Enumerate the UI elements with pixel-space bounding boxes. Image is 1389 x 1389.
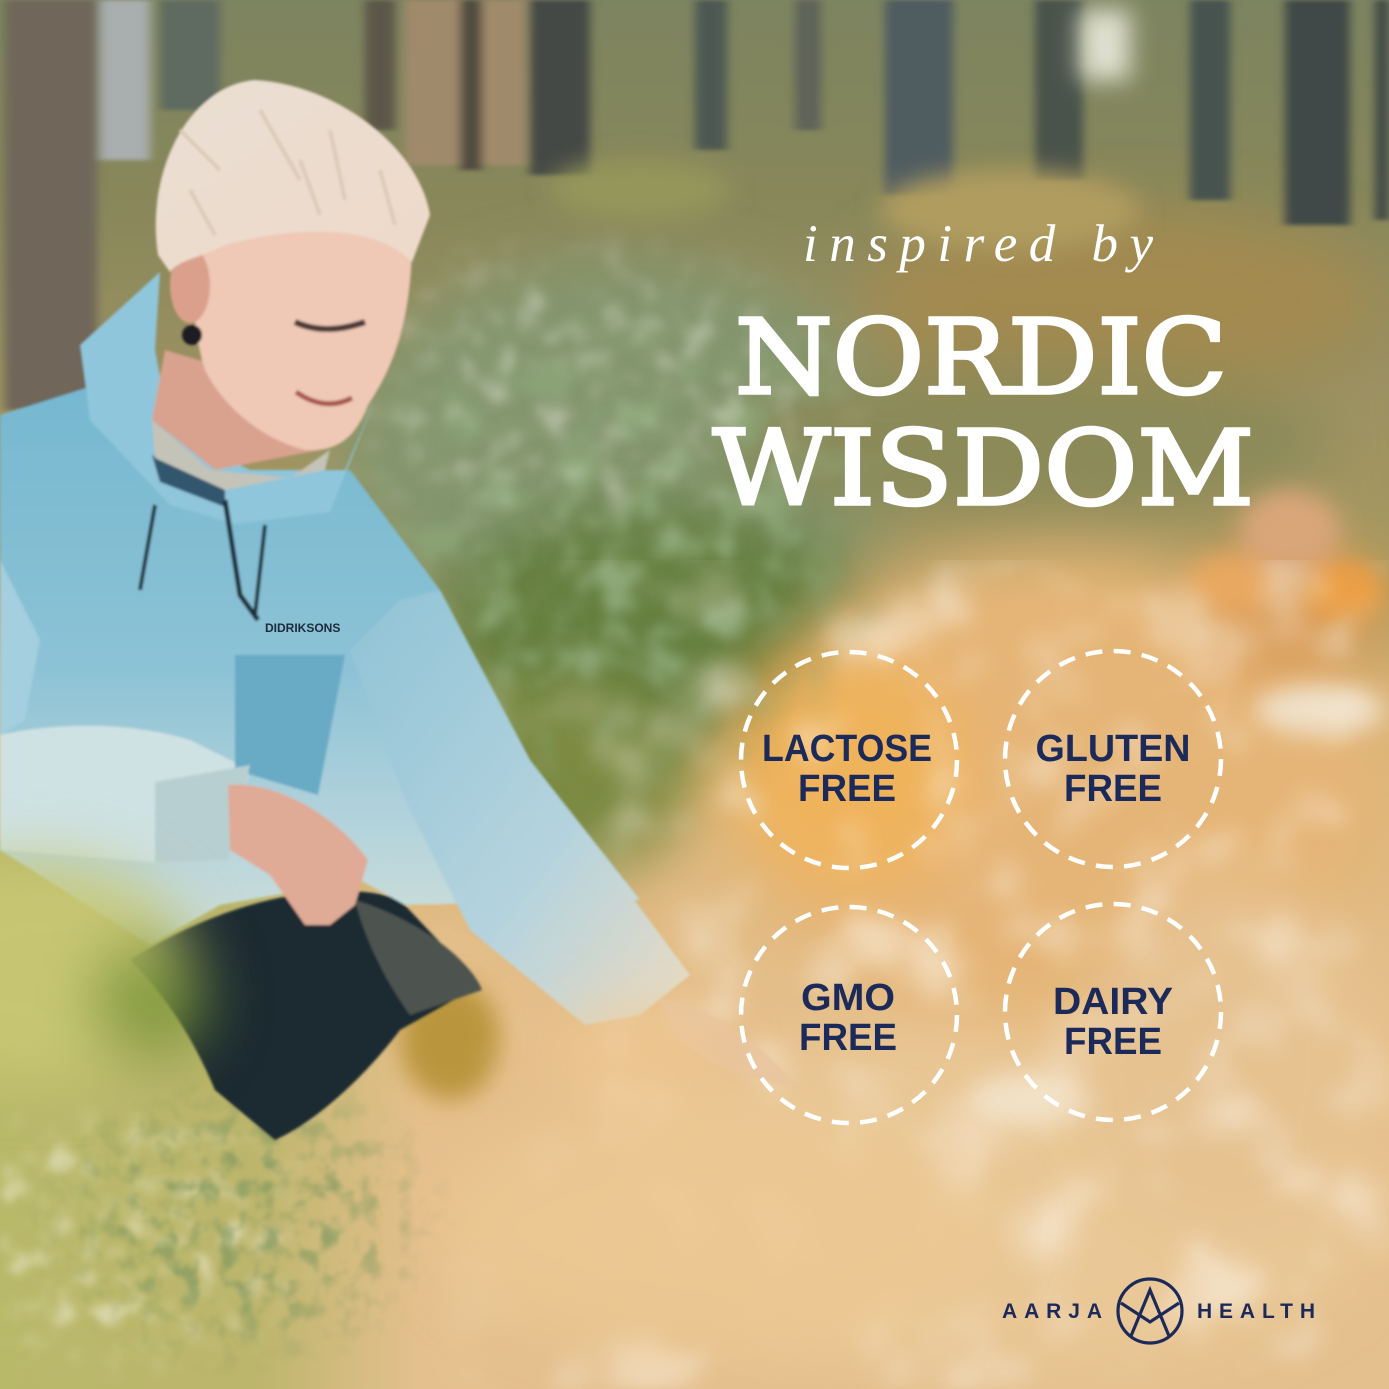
face: [193, 231, 412, 450]
foreground blur haze: [0, 860, 1000, 1350]
haze texture over warm field: [420, 560, 1389, 1389]
jacket body: [0, 388, 640, 945]
badge: dairy free: [1005, 904, 1221, 1120]
knee highlight: [355, 900, 482, 1015]
foreground grass texture: [0, 1110, 291, 1368]
logo: Aarja Health: HEALTH: [1197, 1300, 1315, 1323]
badge: lactose free: FREE: [798, 768, 896, 810]
title: NORDIC: NORDIC: [735, 298, 1227, 418]
logo: Aarja Health: AARJA: [1002, 1300, 1102, 1323]
eye and mouth: [295, 322, 365, 329]
left sleeve: [0, 726, 250, 862]
background: tree trunks: [5, 0, 1389, 410]
reaching hand: [660, 1000, 800, 1090]
title: WISDOM: WISDOM: [713, 409, 1254, 529]
chest pocket: [235, 655, 345, 795]
badge: gluten free: GLUTEN: [1036, 728, 1190, 770]
badge: gmo free: FREE: [799, 1017, 897, 1059]
hair: [156, 80, 430, 272]
badge: dairy free: DAIRY: [1053, 981, 1173, 1023]
logo: Aarja Health: [1002, 1279, 1315, 1343]
cuff: [155, 765, 250, 862]
badge: dairy free: FREE: [1064, 1021, 1162, 1063]
dark trousers: [130, 891, 480, 1140]
earring: [182, 325, 202, 345]
person: woman crouching in blue jacket: [0, 80, 800, 1140]
hood: [80, 272, 375, 524]
ear: [170, 247, 210, 323]
badge: gmo free: [741, 907, 957, 1123]
collar shadow: [152, 455, 225, 507]
title: inspired by: inspired by: [803, 215, 1153, 273]
foliage texture: [417, 366, 880, 772]
badge: gluten free: [1005, 651, 1221, 867]
badge: gluten free: FREE: [1064, 768, 1162, 810]
jacket brand text: DIDRIKSONS: [265, 621, 340, 635]
hair strands: [180, 110, 395, 235]
badge: lactose free: [741, 652, 957, 868]
icon: logo mark: [1118, 1279, 1182, 1343]
badge: gmo free: GMO: [801, 977, 895, 1019]
scarf: [152, 420, 330, 490]
drawcords: [225, 500, 258, 620]
hand on knee: [228, 785, 368, 925]
neck: [152, 350, 320, 470]
right sleeve: [350, 590, 690, 1025]
badge: lactose free: LACTOSE: [762, 728, 932, 770]
